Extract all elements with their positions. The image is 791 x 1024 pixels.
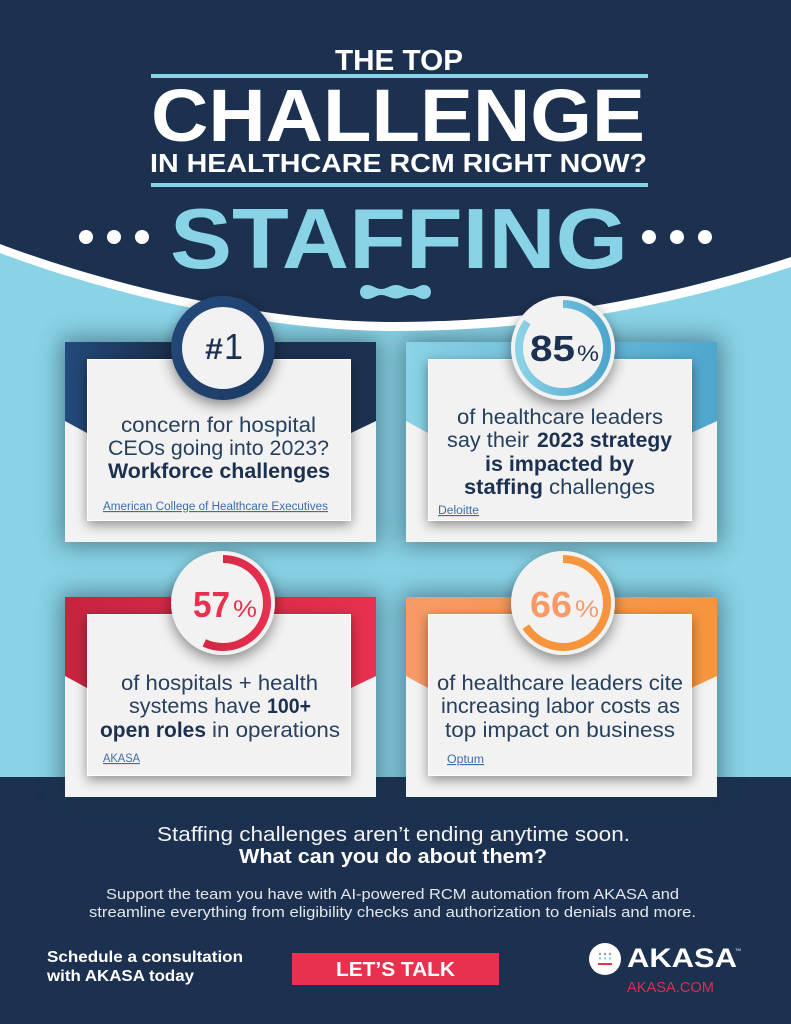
call to action text: Schedule a consultation xyxy=(47,949,243,966)
badge: #1: 1 xyxy=(224,326,243,367)
badge: 66 percent ring xyxy=(511,551,615,655)
card text: 57%: of hospitals + health xyxy=(121,672,318,695)
icon: right dots xyxy=(642,230,712,244)
call to action text: with AKASA today xyxy=(46,968,194,985)
card text: 57% xyxy=(100,672,340,742)
card text: 66% xyxy=(437,672,683,742)
title: CHALLENGE xyxy=(151,74,645,157)
card text: 85%: 2023 strategy xyxy=(537,429,672,452)
title: THE TOP xyxy=(335,45,463,77)
button: let's talk: LET’S TALK xyxy=(336,959,456,981)
supporting text xyxy=(89,886,696,921)
card text: 57%: in operations xyxy=(212,719,340,742)
badge: 66 percent ring: 66 xyxy=(530,584,572,625)
card background xyxy=(406,342,717,542)
card inner panel xyxy=(428,360,692,520)
logo: AKASA: TM xyxy=(735,947,741,952)
heading: STAFFING: STAFFING xyxy=(170,192,628,287)
card background xyxy=(65,342,376,542)
card text: 85%: is impacted by xyxy=(485,453,634,476)
logo: AKASA xyxy=(589,943,741,996)
badge: 57 percent ring: % xyxy=(233,596,257,623)
supporting text: Support the team you have with AI-powered RCM automation from AKASA and xyxy=(106,886,679,903)
panel: 57% xyxy=(65,597,376,797)
button: let's talk xyxy=(292,953,499,985)
card text: 85%: staffing xyxy=(464,476,543,499)
icon: squiggle divider xyxy=(360,285,431,299)
card text: #1: concern for hospital xyxy=(121,414,316,437)
closing question: Staffing challenges aren’t ending anytime soon. xyxy=(157,824,630,846)
closing question: What can you do about them? xyxy=(239,846,547,868)
card text: 57%: systems have xyxy=(129,695,261,718)
card inner panel xyxy=(88,614,350,776)
card background xyxy=(65,597,376,797)
header: navy curved banner xyxy=(0,0,791,331)
card text: 85% xyxy=(447,406,672,499)
badge: 66 percent ring: % xyxy=(575,596,599,623)
card text: 85%: challenges xyxy=(549,476,655,499)
card inner panel xyxy=(428,614,692,776)
title: IN HEALTHCARE RCM RIGHT NOW? xyxy=(150,148,647,178)
badge: 57 percent ring: 57 xyxy=(193,584,230,625)
card background xyxy=(406,597,717,797)
card colour band xyxy=(406,342,717,433)
badge: 85 percent ring: % xyxy=(577,341,599,366)
card text: 57%: 100+ xyxy=(267,695,311,718)
card colour band xyxy=(65,342,376,433)
source: AKASA: AKASA xyxy=(103,753,140,765)
panel: 66% xyxy=(406,597,717,797)
card text: 85%: of healthcare leaders xyxy=(457,406,663,429)
closing question xyxy=(157,824,630,868)
panel: #1 concern xyxy=(65,342,376,542)
source: Deloitte: Deloitte xyxy=(438,505,479,517)
source: Optum: Optum xyxy=(447,754,484,766)
card text: 57%: open roles xyxy=(100,719,206,742)
supporting text: streamline everything from eligibility checks and authorization to denials and more. xyxy=(89,904,696,921)
title xyxy=(150,45,648,187)
badge: #1 xyxy=(171,296,275,400)
panel: 85% xyxy=(406,342,717,542)
footer: navy band xyxy=(0,777,791,1024)
card text: 85%: say their xyxy=(447,429,529,452)
card text: #1: Workforce challenges xyxy=(108,460,330,483)
card inner panel xyxy=(88,360,350,520)
badge: 57 percent ring xyxy=(171,551,275,655)
badge: 85 percent ring xyxy=(511,296,615,400)
card text: 66%: top impact on business xyxy=(445,719,675,742)
card colour band xyxy=(406,597,717,688)
card colour band xyxy=(65,597,376,688)
card text: #1 xyxy=(108,414,330,483)
card shadows xyxy=(61,338,721,801)
card text: 66%: of healthcare leaders cite xyxy=(437,672,683,695)
logo: AKASA: AKASA xyxy=(627,943,737,973)
badge: 85 percent ring: 85 xyxy=(530,328,575,369)
card text: 66%: increasing labor costs as xyxy=(441,695,680,718)
icon: left dots xyxy=(79,230,149,244)
call to action text xyxy=(46,949,243,985)
badge: #1: # xyxy=(205,333,223,366)
card text: #1: CEOs going into 2023? xyxy=(108,437,329,460)
logo: AKASA: AKASA.COM xyxy=(627,979,714,996)
source: ACHE: American College of Healthcare Executives xyxy=(103,501,328,513)
